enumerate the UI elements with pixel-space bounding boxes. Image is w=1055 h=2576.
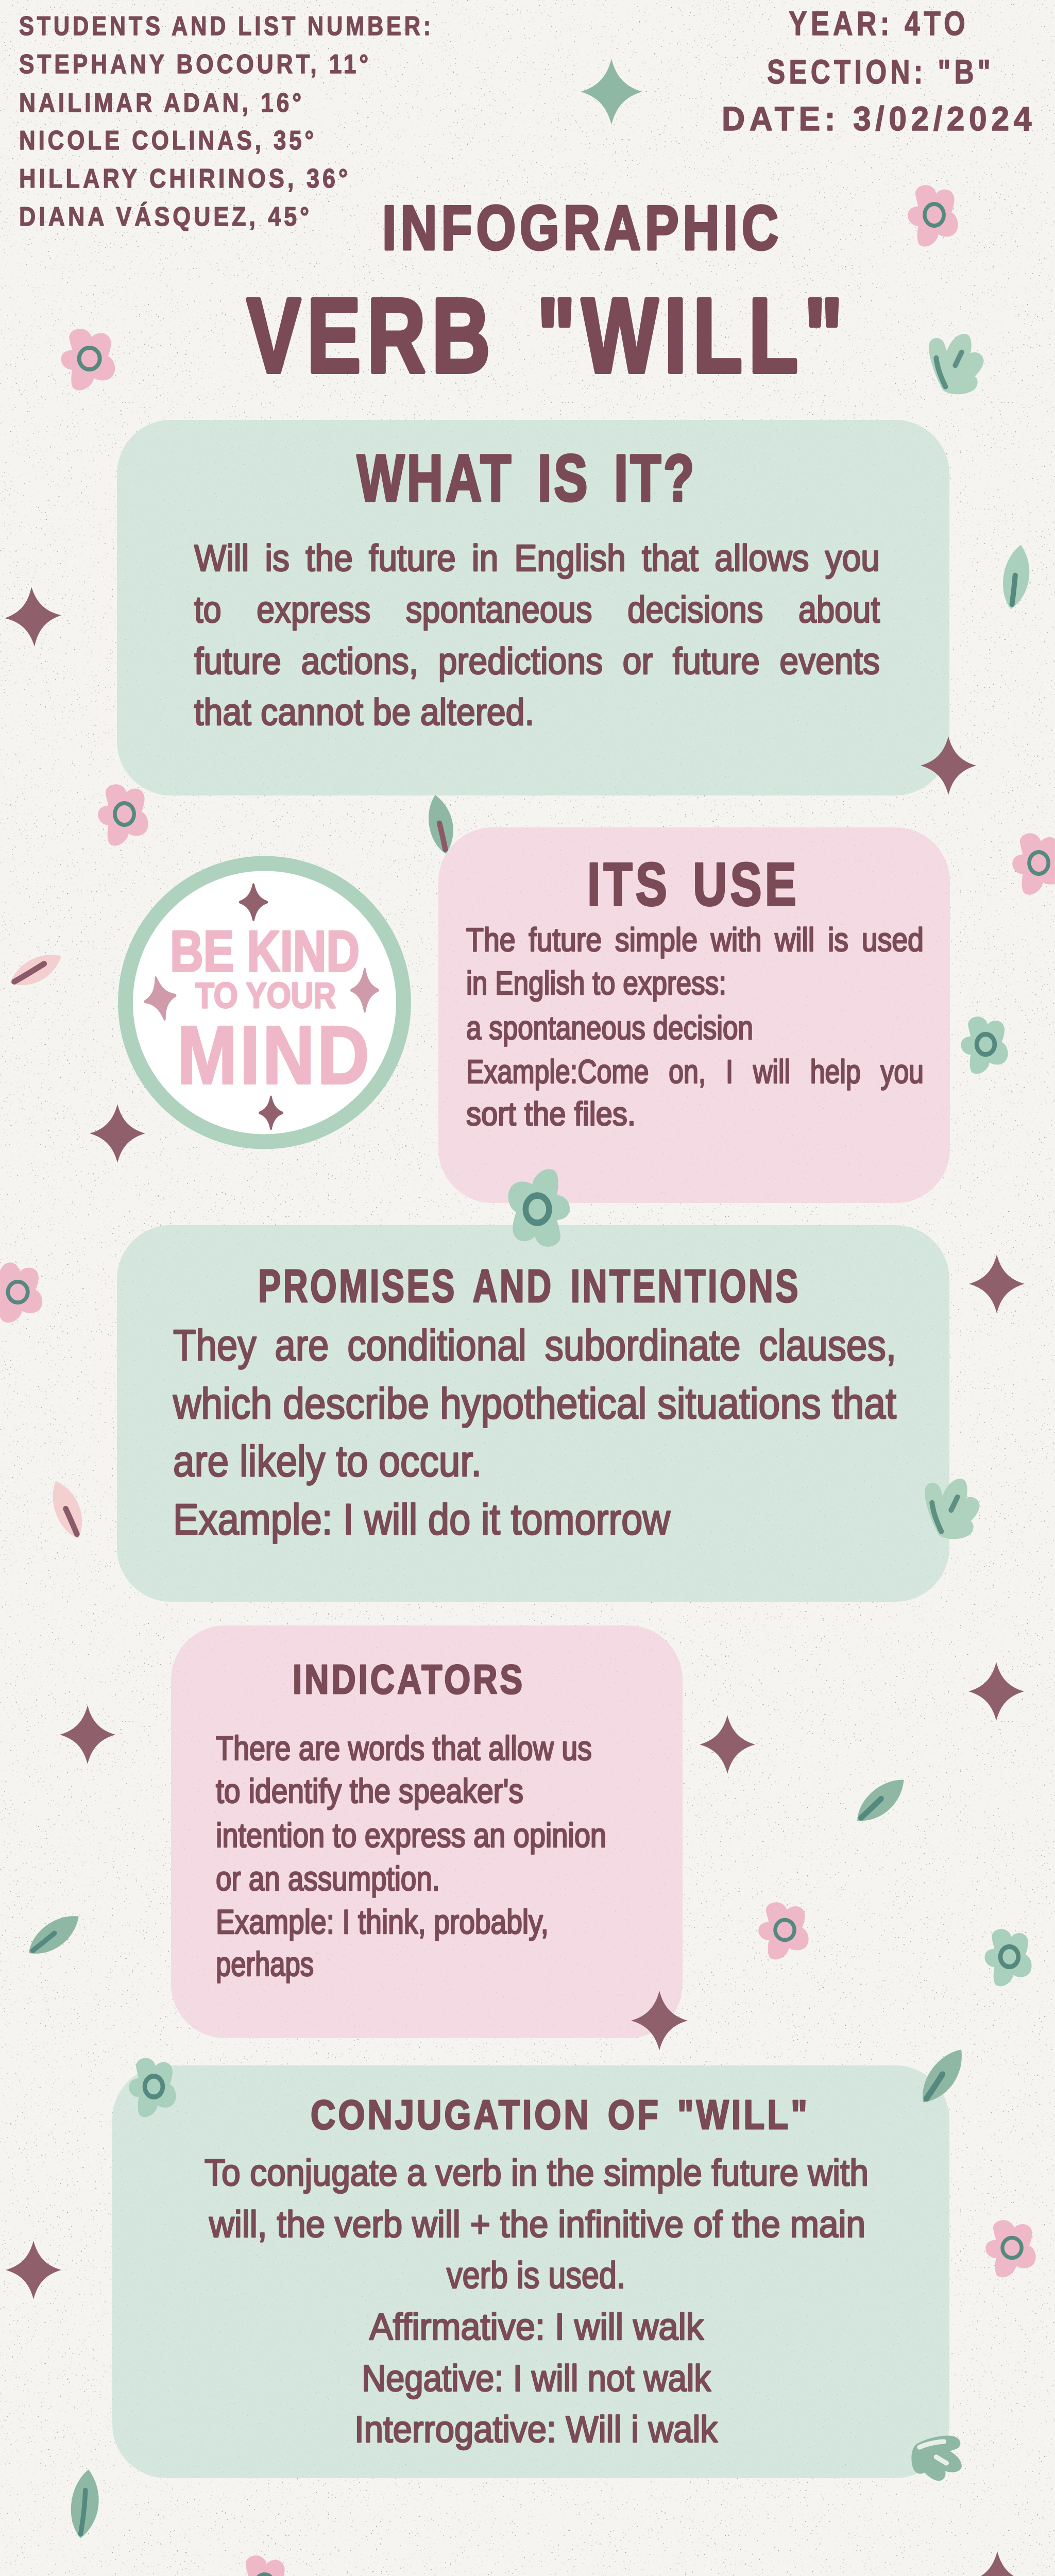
text block: its use: The future simple with will is used: [466, 921, 924, 958]
text block: its use: a spontaneous decision: [466, 1009, 753, 1046]
sparkles: maroon: [3, 585, 1026, 2576]
text block: its use: Example:Come on, I will help you: [466, 1053, 924, 1090]
text block: conjugation: Affirmative: I will walk: [369, 2307, 704, 2348]
icon: bush leaf top right: [929, 334, 984, 394]
leaf: left of indicators: [23, 1906, 86, 1964]
text block: conjugation: To conjugate a verb in the simple future with: [205, 2153, 869, 2194]
panel: indicators: [171, 1625, 683, 2038]
panel: what is it: [117, 420, 949, 795]
text block: its use: sort the files.: [466, 1095, 636, 1132]
leaf: right of indicators: [850, 1770, 911, 1831]
leaf: right of first panel: [1000, 544, 1032, 611]
sticker: be kind to your mind: BE KIND: [170, 919, 360, 984]
sticker: be kind to your mind: [126, 863, 404, 1142]
panel: its use: [438, 827, 950, 1203]
students and list numbers: HILLARY CHIRINOS, 36°: [19, 164, 351, 194]
text block: definition: Will is the future in English that allows you: [194, 538, 880, 579]
text block: conjugation: Interrogative: Will i walk: [354, 2409, 718, 2450]
heading: its use: ITS USE: [587, 851, 799, 919]
text block: indicators: to identify the speaker's: [216, 1772, 523, 1810]
text block: indicators: or an assumption.: [216, 1859, 440, 1897]
heading: what is it: WHAT IS IT?: [357, 442, 696, 515]
text block: promises: They are conditional subordinate clauses,: [173, 1321, 896, 1369]
text block: indicators: perhaps: [216, 1945, 314, 1983]
text block: definition: future actions, predictions or future events: [194, 641, 880, 682]
title: infographic: INFOGRAPHIC: [382, 193, 782, 263]
text block: conjugation: Negative: I will not walk: [362, 2358, 711, 2399]
text block: its use: in English to express:: [466, 964, 726, 1002]
year, section, date: SECTION: "B": [767, 53, 994, 91]
text block: promises: Example: I will do it tomorrow: [173, 1495, 670, 1544]
heading: promises and intentions: PROMISES AND INTENTIONS: [258, 1261, 801, 1312]
heading: conjugation: CONJUGATION OF "WILL": [311, 2092, 810, 2138]
year, section, date: YEAR: 4TO: [789, 4, 969, 42]
leaf: top right of conjugation panel: [914, 2042, 971, 2111]
heading: indicators: INDICATORS: [293, 1656, 525, 1702]
students and list numbers: [19, 11, 434, 232]
text block: definition: [194, 538, 880, 733]
year, section, date: [722, 4, 1036, 138]
icon: bush leaf on promises panel: [925, 1479, 980, 1539]
text block: conjugation: will, the verb will + the infinitive of the main: [209, 2204, 865, 2245]
text block: conjugation: [205, 2153, 869, 2450]
leaves: [6, 544, 1032, 2539]
leaf: pink lower left: [43, 1477, 92, 1543]
text block: definition: to express spontaneous decisions about: [194, 589, 880, 631]
students and list numbers: NAILIMAR ADAN, 16°: [19, 88, 304, 118]
icon: green sparkle: [581, 59, 642, 125]
leaf: bottom left: [70, 2469, 100, 2539]
students and list numbers: DIANA VÁSQUEZ, 45°: [19, 202, 312, 232]
panel: conjugation of will: [112, 2065, 949, 2478]
leaf: pink upper left: [6, 945, 66, 995]
sticker: be kind to your mind: TO YOUR: [195, 975, 336, 1015]
flowers: green: [129, 1016, 1032, 2117]
year, section, date: DATE: 3/02/2024: [722, 99, 1036, 138]
leaf: above its use panel: [422, 792, 460, 856]
sticker: be kind to your mind: MIND: [177, 1009, 372, 1101]
text block: indicators: There are words that allow us: [216, 1729, 592, 1767]
students and list numbers: STEPHANY BOCOURT, 11°: [19, 49, 371, 79]
text block: definition: that cannot be altered.: [194, 692, 534, 733]
students and list numbers: NICOLE COLINAS, 35°: [19, 126, 317, 156]
panel: promises and intentions: [117, 1225, 949, 1602]
text block: promises: are likely to occur.: [173, 1437, 482, 1485]
title: verb will: VERB "WILL": [247, 277, 849, 395]
text block: conjugation: verb is used.: [447, 2255, 625, 2296]
text block: indicators: intention to express an opinion: [216, 1816, 606, 1854]
text block: indicators: Example: I think, probably,: [216, 1903, 549, 1941]
students and list numbers: STUDENTS AND LIST NUMBER:: [19, 11, 434, 41]
text block: promises: [173, 1321, 896, 1544]
icon: bush leaf on conjugation panel: [911, 2435, 962, 2481]
text block: promises: which describe hypothetical situations that: [173, 1379, 896, 1428]
text block: its use: [466, 921, 924, 1132]
text block: indicators: [216, 1729, 606, 1983]
